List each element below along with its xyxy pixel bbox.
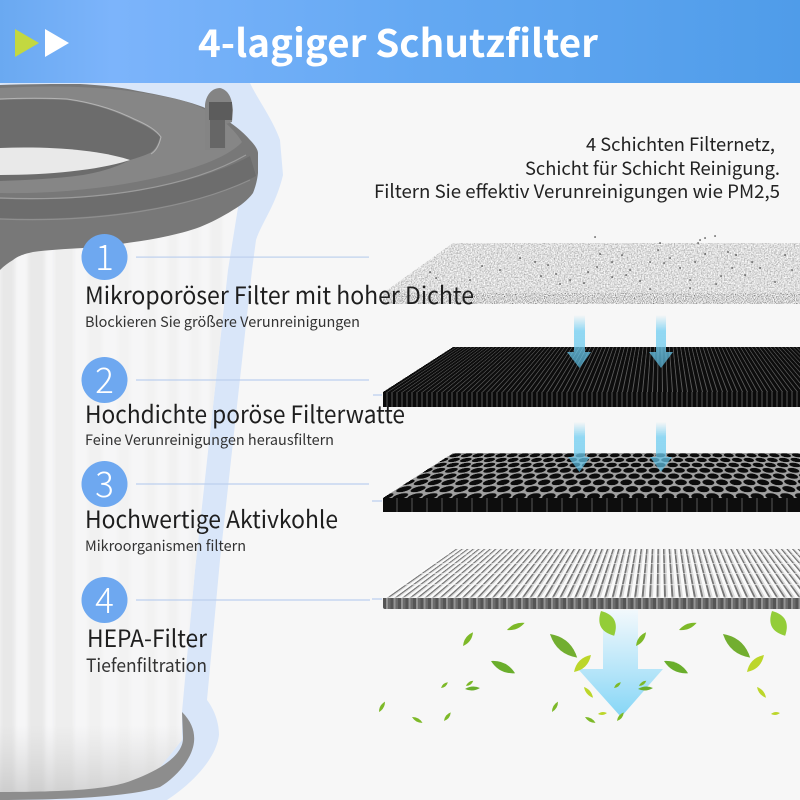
title: 4-lagiger Schutzfilter	[198, 13, 598, 68]
large clean air arrow	[578, 610, 663, 717]
filter layer 2: dense black striped sheet	[383, 347, 800, 407]
header bar	[0, 0, 800, 83]
filter top cap	[0, 84, 258, 270]
step 2 heading: Hochdichte poröse Filterwatte	[85, 395, 405, 430]
intro text: Filtern Sie effektiv Verunreinigungen wie PM2,5	[374, 178, 780, 204]
step 4 heading: HEPA-Filter	[87, 619, 208, 654]
filter pleated body	[0, 190, 245, 800]
flow arrow 4	[650, 422, 672, 472]
step 2 description: Feine Verunreinigungen herausfiltern	[85, 429, 334, 450]
step 2 badge	[82, 353, 128, 404]
layer 2 connector line	[136, 380, 382, 395]
step 3 heading: Hochwertige Aktivkohle	[85, 500, 338, 535]
step 1 description: Blockieren Sie größere Verunreinigungen	[85, 311, 360, 332]
step 4 badge	[82, 573, 128, 624]
cap locking tab	[205, 88, 233, 150]
step 1 badge: 1	[95, 230, 114, 281]
step 4 badge: 4	[95, 573, 114, 624]
step 1 badge	[82, 230, 128, 281]
layer 3 connector line	[136, 484, 382, 501]
flow arrow 2	[649, 315, 673, 368]
flow arrow 3	[568, 422, 590, 472]
layer 4 connector line	[136, 599, 382, 600]
light blue halo behind filter	[0, 83, 283, 800]
step 4 description: Tiefenfiltration	[86, 652, 207, 678]
intro text: 4 Schichten Filternetz,	[586, 131, 775, 157]
filter layer 4: HEPA pleated sheet	[383, 549, 800, 609]
layer 1 connector line	[136, 256, 369, 258]
filter bottom cap	[0, 712, 194, 800]
green leaves	[377, 607, 792, 724]
step 1 heading: Mikroporöser Filter mit hoher Dichte	[85, 276, 474, 311]
flow arrow 1	[567, 315, 591, 368]
step 3 description: Mikroorganismen filtern	[85, 535, 246, 556]
intro text: Schicht für Schicht Reinigung.	[525, 155, 780, 181]
intro text	[374, 131, 780, 204]
icon: double play arrows	[15, 29, 69, 57]
filter layer 1: microporous grey sheet	[383, 236, 800, 304]
filter layer 3: activated carbon honeycomb sheet	[383, 453, 800, 512]
step 2 badge: 2	[95, 353, 114, 404]
step 3 badge	[82, 457, 128, 508]
step 3 badge: 3	[95, 457, 114, 508]
